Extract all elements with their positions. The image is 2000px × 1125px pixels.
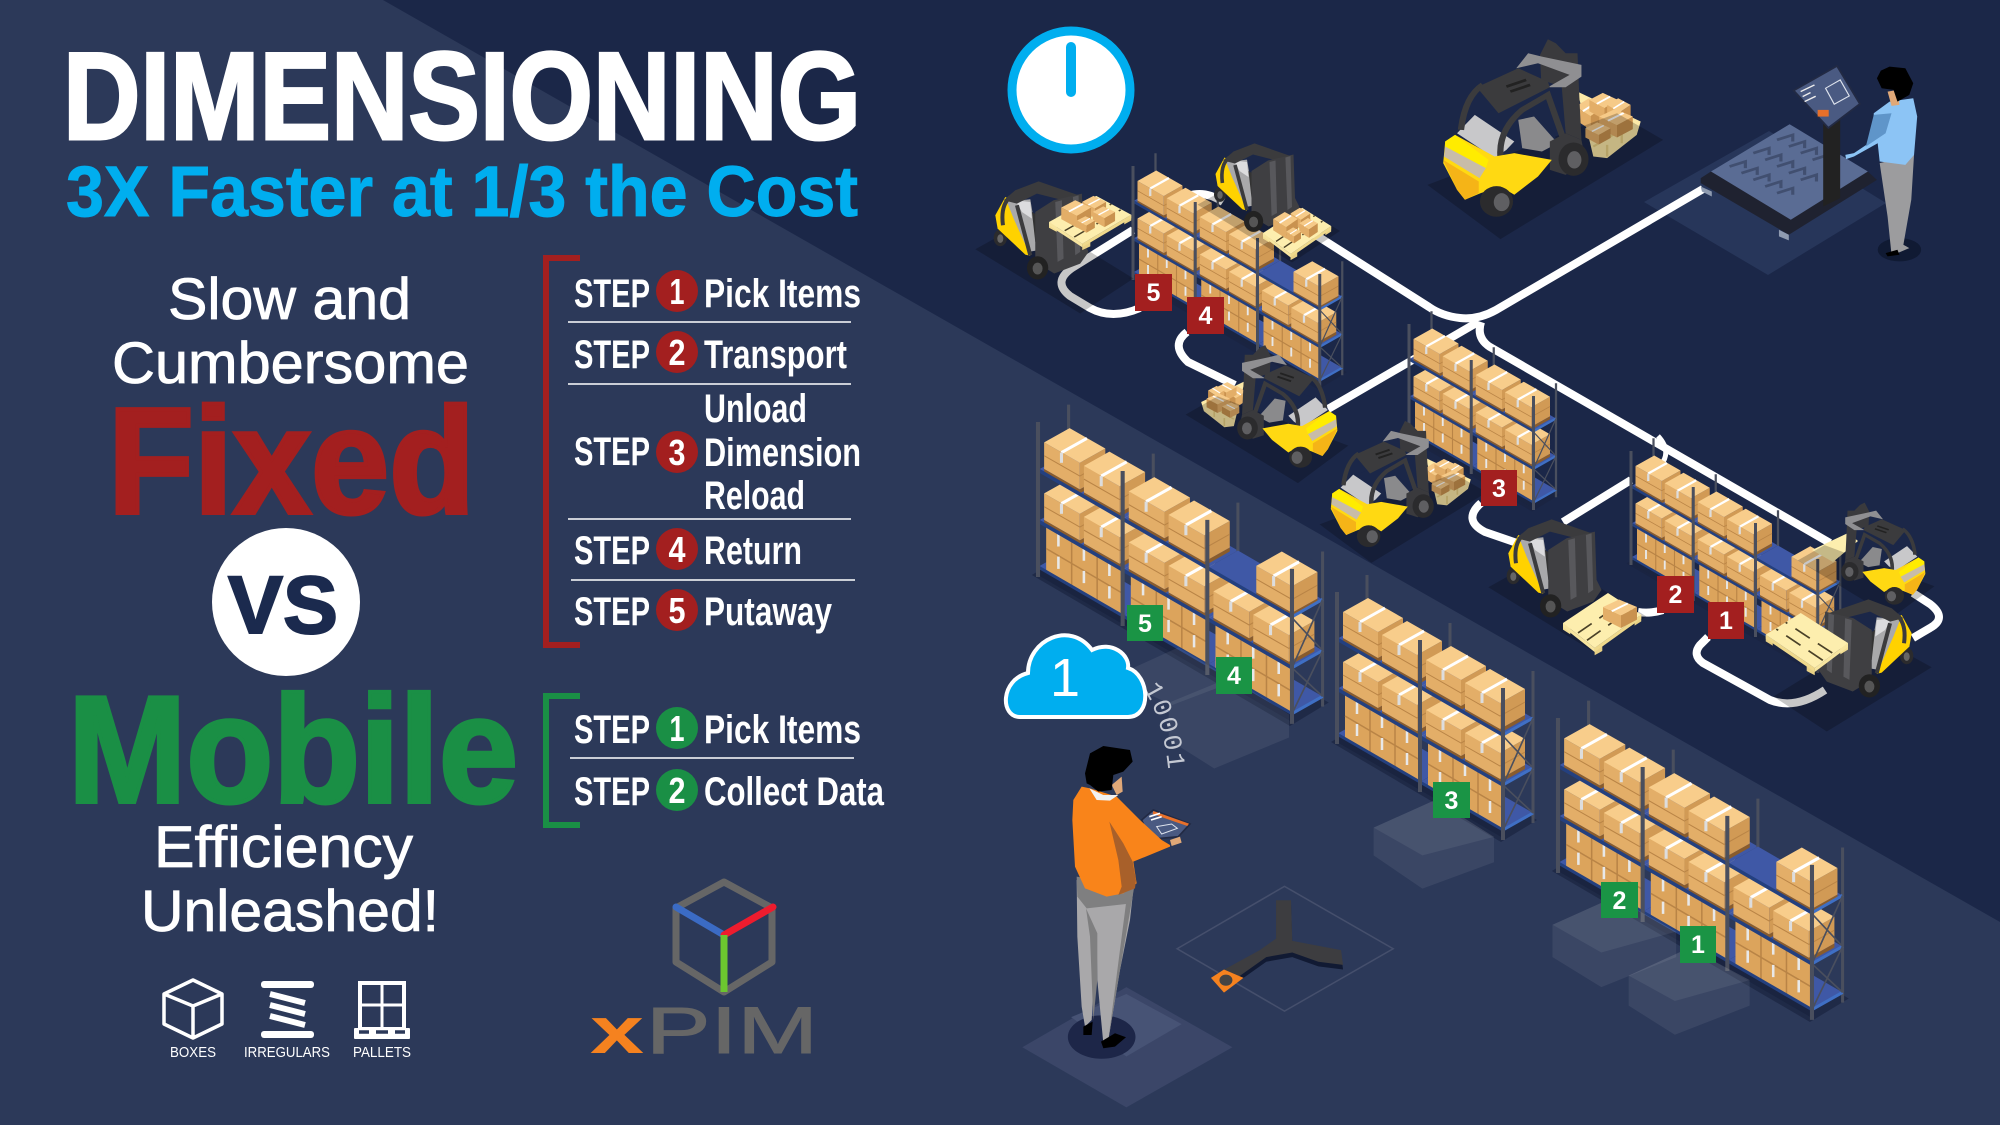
rack: fixed 5-4 xyxy=(1128,153,1347,390)
step 4 fixed: STEP xyxy=(574,529,650,573)
device scanner on floor xyxy=(1177,886,1393,1011)
subtitle: 3X Faster at 1/3 the Cost xyxy=(66,153,858,232)
vs badge: VS xyxy=(228,560,338,651)
badge 2 red xyxy=(1657,576,1694,613)
step 1 fixed xyxy=(574,270,861,316)
icon: cloud: 1 xyxy=(1050,648,1080,708)
ghost boxes on floor xyxy=(1133,647,1750,1035)
step 3 fixed: Dimension xyxy=(704,431,861,475)
forklift: top left xyxy=(975,181,1134,314)
badge 4 red: 4 xyxy=(1199,302,1213,330)
step 4 fixed: 4 xyxy=(668,529,686,570)
step 4 fixed: Return xyxy=(704,529,802,573)
step 1 fixed: Pick Items xyxy=(704,272,861,316)
step 3 fixed: STEP xyxy=(574,430,650,474)
badge 3 red: 3 xyxy=(1492,475,1506,503)
heading: efficiency unleashed: Efficiency xyxy=(154,815,413,880)
step 3 fixed: Unload xyxy=(704,387,807,431)
badge 2 red: 2 xyxy=(1669,581,1682,609)
heading: slow and cumbersome: Cumbersome xyxy=(112,331,469,396)
dark warehouse zone xyxy=(383,0,2000,922)
step 2 mobile: 2 xyxy=(668,770,686,811)
forklift: top centre xyxy=(1427,39,1663,239)
icon: irregulars: IRREGULARS xyxy=(244,1044,330,1061)
step 3 fixed: 3 xyxy=(668,432,686,473)
step 1 fixed: 1 xyxy=(670,271,684,312)
icon: boxes: BOXES xyxy=(170,1044,216,1061)
logo: xPIM: x xyxy=(590,993,644,1067)
step 1 mobile: STEP xyxy=(574,708,650,752)
step 3 fixed xyxy=(574,387,861,518)
heading: slow and cumbersome: Slow and xyxy=(168,267,411,332)
transport path lines xyxy=(1061,189,1939,703)
binary data stream: 10001 xyxy=(1146,682,1185,768)
badge 4 red xyxy=(1187,297,1224,334)
forklift: upper rack xyxy=(1198,143,1340,262)
rack: fixed 3 xyxy=(1404,311,1559,512)
person at scale xyxy=(1845,67,1917,256)
badge 3 green: 3 xyxy=(1445,787,1458,815)
icon: boxes xyxy=(164,980,222,1061)
badge 3 green xyxy=(1433,782,1470,818)
heading: efficiency unleashed xyxy=(141,815,439,944)
step 5 fixed: Putaway xyxy=(704,590,833,634)
step 2 fixed: Transport xyxy=(704,333,847,377)
icon: pallets xyxy=(353,983,411,1061)
forklift: loop 4 xyxy=(1186,345,1348,483)
badge 1 red xyxy=(1708,602,1744,639)
green bracket xyxy=(546,696,580,825)
forklift: rack 3 xyxy=(1320,421,1487,563)
step 1 mobile: 1 xyxy=(670,708,684,749)
badge 4 green xyxy=(1216,657,1252,694)
step 2 mobile: Collect Data xyxy=(704,770,885,814)
icon: clock xyxy=(1012,31,1130,149)
step 1 fixed: STEP xyxy=(574,272,650,316)
step 5 fixed: STEP xyxy=(574,590,650,634)
heading: slow and cumbersome xyxy=(112,267,469,396)
heading: fixed: Fixed xyxy=(108,376,475,545)
icon: irregulars xyxy=(244,981,330,1061)
icon: pallets: PALLETS xyxy=(353,1044,411,1061)
binary data stream xyxy=(1146,682,1185,768)
logo: xPIM xyxy=(590,882,818,1067)
step 4 fixed xyxy=(574,528,802,573)
forklift: pallet bottom xyxy=(1488,519,1646,655)
badge 5 green: 5 xyxy=(1138,610,1152,638)
floor marker under person xyxy=(1022,987,1232,1107)
rack: mobile 2-1 xyxy=(1552,701,1849,1022)
badge 5 red: 5 xyxy=(1147,279,1161,307)
person with tablet xyxy=(1072,746,1190,1048)
badge 1 green xyxy=(1680,926,1716,963)
step 2 mobile xyxy=(574,769,885,814)
red bracket xyxy=(546,258,580,645)
badge 1 red: 1 xyxy=(1719,607,1733,635)
step 2 fixed xyxy=(574,331,847,377)
badge 5 red xyxy=(1135,274,1172,311)
vs badge xyxy=(212,528,360,676)
panel: fixed steps xyxy=(568,270,861,634)
step 1 mobile: Pick Items xyxy=(704,708,861,752)
step 3 fixed: Reload xyxy=(704,474,805,518)
forklift: right upper xyxy=(1798,503,1935,617)
badge 3 red xyxy=(1481,470,1517,506)
step 5 fixed xyxy=(574,589,833,634)
step 1 mobile xyxy=(574,707,861,752)
forklift: right lower xyxy=(1766,599,1932,732)
panel: mobile steps xyxy=(570,707,885,814)
title: DIMENSIONING xyxy=(63,28,861,166)
badge 5 green xyxy=(1127,605,1163,641)
step 2 mobile: STEP xyxy=(574,770,650,814)
badge 2 green xyxy=(1601,882,1638,918)
heading: efficiency unleashed: Unleashed! xyxy=(141,879,439,944)
logo: xPIM: PIM xyxy=(646,993,818,1067)
weighing scale with monitor xyxy=(1701,66,1921,261)
badge 2 green: 2 xyxy=(1613,887,1626,915)
rack: fixed 2-1 xyxy=(1626,438,1845,674)
step 2 fixed: STEP xyxy=(574,333,650,377)
red step badges xyxy=(1135,274,1744,639)
green step badges xyxy=(1127,605,1716,963)
rack: mobile 3 xyxy=(1331,575,1537,842)
rack: mobile 5-4 xyxy=(1032,405,1329,726)
step 2 fixed: 2 xyxy=(668,332,686,373)
badge 4 green: 4 xyxy=(1227,662,1241,690)
badge 1 green: 1 xyxy=(1691,931,1705,959)
scale platform shadow xyxy=(1644,131,1886,275)
heading: mobile: Mobile xyxy=(68,665,518,835)
step 5 fixed: 5 xyxy=(668,590,686,631)
icon: cloud xyxy=(1006,635,1145,717)
